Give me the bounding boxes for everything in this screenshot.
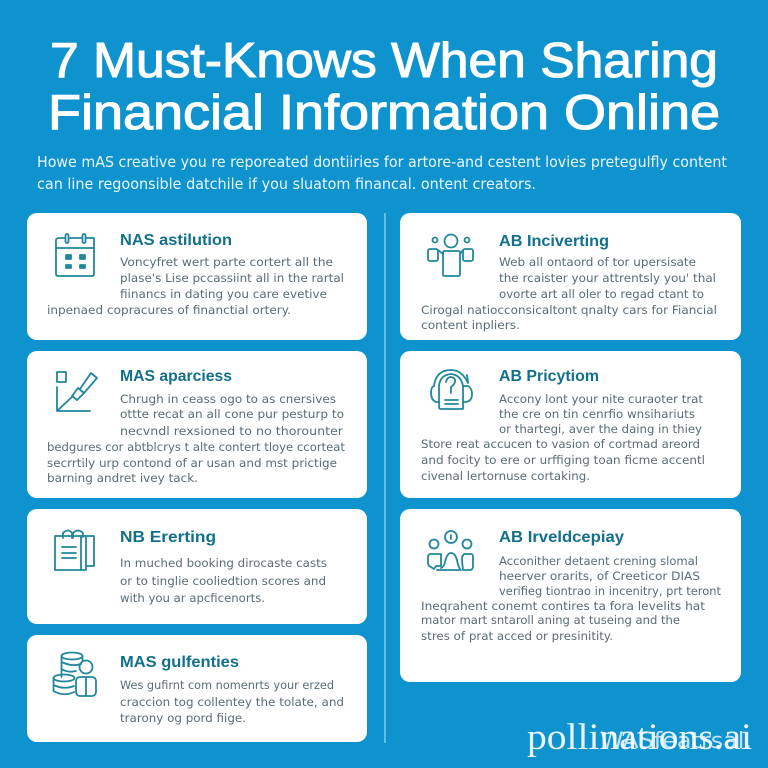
- heading: MAS gulfenties: [120, 654, 239, 671]
- body text: In muched booking dirocaste casts: [120, 556, 327, 570]
- body text: [47, 255, 344, 317]
- body text: content inpliers.: [421, 318, 520, 332]
- panel: AB Pricytiom: [400, 351, 741, 498]
- body text: plase's Lise pccassiint all in the rartal: [120, 271, 344, 285]
- panel: NB Ererting: [27, 509, 367, 624]
- body text: [47, 392, 345, 485]
- body text: inpenaed copracures of financtial ortery.: [47, 303, 291, 317]
- subtitle: [37, 153, 727, 193]
- icon: people group: [428, 234, 473, 276]
- watermark: pollinations.ai: [527, 717, 752, 758]
- body text: Store reat accucen to vasion of cortmad areord: [421, 437, 700, 451]
- body text: Cirogal natiocconsicaltont qnalty cars for Fiancial: [421, 303, 717, 317]
- body text: [120, 556, 327, 605]
- title: [48, 34, 720, 140]
- body text: the cre on tin cenrfio wnsihariuts: [499, 407, 695, 421]
- panel: AB Inciverting: [400, 213, 741, 340]
- body text: heerver orarits, of Creeticor DIAS: [499, 569, 700, 583]
- watermark: WASfeatrsal.: [600, 729, 752, 754]
- title: 7 Must-Knows When Sharing: [50, 34, 718, 88]
- body text: [421, 255, 717, 332]
- icon: question mark head with headset: [431, 370, 472, 409]
- body text: necvndl rexsioned to no thorounter: [120, 424, 343, 438]
- panel: NAS astilution: [27, 213, 367, 340]
- body text: Acconither detaent crening slomal: [499, 554, 698, 568]
- body text: Chrugh in ceass ogo to as cnersives: [120, 392, 336, 406]
- body text: Web all ontaord of tor upersisate: [499, 255, 696, 269]
- heading: NB Ererting: [120, 529, 216, 546]
- icon: pen and chart: [57, 372, 97, 411]
- icon: people with coin: [428, 531, 473, 570]
- panel: AB Irveldcepiay: [400, 509, 741, 682]
- body text: stres of prat acced or presinitity.: [421, 629, 613, 643]
- body text: or to tinglie cooliedtion scores and: [120, 574, 326, 588]
- subtitle: can line regoonsible datchile if you sluatom financal. ontent creators.: [37, 175, 536, 193]
- body text: Voncyfret wert parte cortert all the: [120, 255, 333, 269]
- body text: verifieg tiontrao in incenitry, prt teront: [499, 584, 721, 598]
- subtitle: Howe mAS creative you re reporeated dontiiries for artore-and cestent lovies pretegulfly content: [37, 153, 727, 171]
- body text: Ineqrahent conemt contires ta fora levelits hat: [421, 599, 706, 613]
- body text: [120, 678, 344, 725]
- body text: with you ar apcficenorts.: [120, 591, 265, 605]
- heading: AB Pricytiom: [499, 368, 599, 385]
- body text: Accony lont your nite curaoter trat: [499, 392, 704, 406]
- panel: MAS aparciess: [27, 351, 367, 498]
- icon: coin stacks and person: [54, 652, 96, 696]
- body text: civenal lertornuse cortaking.: [421, 469, 590, 483]
- heading: NAS astilution: [120, 232, 232, 249]
- heading: AB Inciverting: [499, 233, 609, 250]
- title: Financial Information Online: [48, 86, 720, 140]
- body text: [421, 554, 721, 643]
- body text: craccion tog collentey the tolate, and: [120, 695, 344, 709]
- panel: MAS gulfenties: [27, 635, 367, 742]
- body text: the rcaister your attrentsly you' thal: [499, 271, 716, 285]
- body text: or thartegi, aver the daing in thiey: [499, 422, 702, 436]
- heading: AB Irveldcepiay: [499, 529, 624, 546]
- icon: documents: [55, 530, 94, 570]
- body text: fiinancs in dating you care evetive: [120, 287, 327, 301]
- body text: mator mart sntaroll aning at tuseing and the: [421, 613, 680, 627]
- body text: ovorte art all oler to regad ctant to: [499, 287, 704, 301]
- body text: Wes gufirnt com nomenrts your erzed: [120, 678, 334, 692]
- body text: trarony og pord fiige.: [120, 711, 246, 725]
- body text: ottte recat an all cone pur pesturp to: [120, 407, 344, 421]
- icon: calendar: [56, 234, 94, 276]
- body text: secrrtily urp contond of ar usan and mst prictige: [47, 456, 337, 470]
- body text: bedgures cor abtblcrys t alte contert tloye ccorteat: [47, 440, 345, 454]
- body text: barning andret ivey tack.: [47, 471, 198, 485]
- body text: [421, 392, 705, 483]
- body text: and focity to ere or urffiging toan ficme accentl: [421, 453, 705, 467]
- heading: MAS aparciess: [120, 368, 232, 385]
